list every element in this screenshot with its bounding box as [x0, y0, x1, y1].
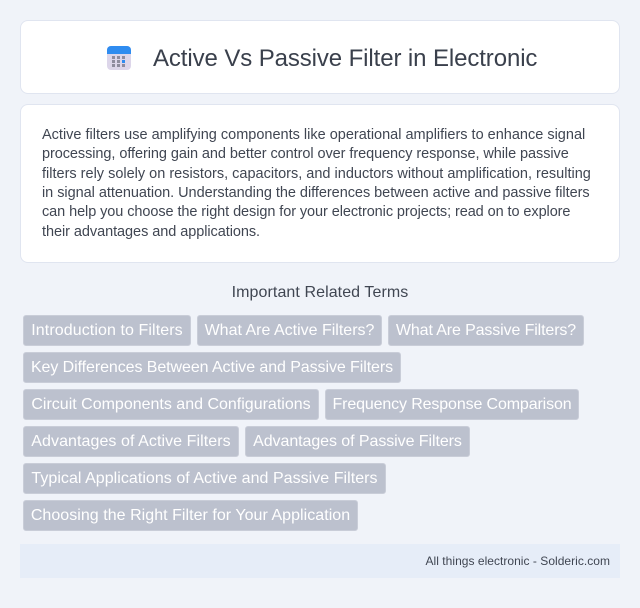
- intro text: can help you choose the right design for your electronic projects; read on to explore: [42, 204, 570, 220]
- intro text: Active filters use amplifying components like operational amplifiers to enhance signal: [42, 127, 585, 143]
- footer bar: [20, 544, 620, 578]
- tag: active filters: [197, 315, 382, 346]
- intro paragraph card: [20, 104, 620, 263]
- tag: circuit components: [23, 389, 319, 420]
- header card: [20, 20, 620, 94]
- intro text: in signal attenuation. Understanding the differences between active and passive filters: [42, 185, 590, 201]
- title: Active Vs Passive Filter in Electronic: [153, 45, 537, 72]
- tag: choosing: Choosing the Right Filter for Your Application: [31, 507, 350, 524]
- tag: active filters: What Are Active Filters?: [205, 322, 374, 339]
- tag: advantages active: Advantages of Active Filters: [31, 433, 231, 450]
- tag: frequency response: [325, 389, 579, 420]
- tag: passive filters: What Are Passive Filters?: [396, 322, 576, 339]
- tag: introduction: Introduction to Filters: [31, 322, 183, 339]
- intro text: processing, offering gain and better control over frequency response, while passive: [42, 146, 569, 162]
- tag: key differences: Key Differences Between Active and Passive Filters: [31, 359, 393, 376]
- tag: frequency response: Frequency Response Comparison: [332, 396, 572, 413]
- tag: typical applications: Typical Applications of Active and Passive Filters: [31, 470, 378, 487]
- intro text: [42, 127, 591, 240]
- tag: advantages active: [23, 426, 239, 457]
- related terms heading: Important Related Terms: [232, 284, 408, 301]
- intro text: their advantages and applications.: [42, 224, 260, 240]
- related terms tags: [23, 315, 584, 531]
- tag: advantages passive: Advantages of Passive Filters: [253, 433, 462, 450]
- footer text: All things electronic - Solderic.com: [426, 554, 610, 568]
- tag: typical applications: [23, 463, 386, 494]
- icon: calendar: [107, 46, 131, 70]
- tag: advantages passive: [245, 426, 470, 457]
- tag: choosing: [23, 500, 358, 531]
- tag: passive filters: [388, 315, 584, 346]
- tag: key differences: [23, 352, 401, 383]
- intro text: filters rely solely on resistors, capacitors, and inductors without amplification, resulting: [42, 166, 591, 182]
- tag: circuit components: Circuit Components and Configurations: [31, 396, 311, 413]
- tag: introduction: [23, 315, 191, 346]
